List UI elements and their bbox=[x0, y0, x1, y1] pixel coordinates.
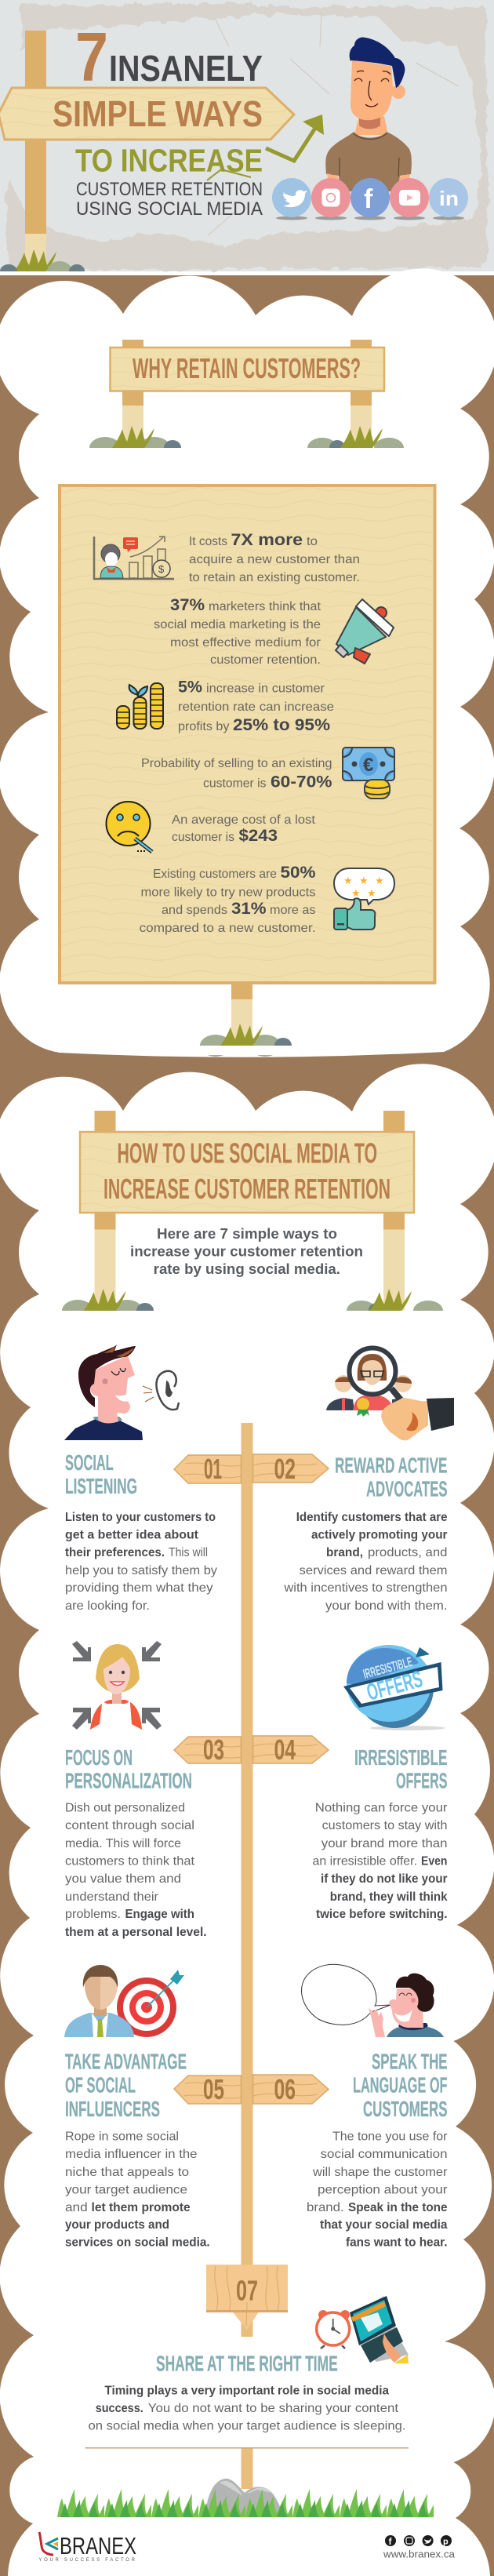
body text: Listen to your customers to bbox=[65, 1511, 216, 1524]
body text: with incentives to strengthen bbox=[283, 1581, 447, 1595]
arrow sign 05 bbox=[174, 2073, 242, 2105]
stat 1 text: acquire a new customer than bbox=[189, 553, 360, 566]
body text: services and reward them bbox=[300, 1564, 447, 1577]
item 07 sign bbox=[206, 2265, 288, 2330]
stat 1 text: 7X more bbox=[231, 531, 303, 549]
heading: PERSONALIZATION bbox=[65, 1768, 192, 1792]
item 07 body: success. bbox=[96, 2402, 143, 2415]
body text: customers to think that bbox=[65, 1854, 195, 1868]
stat 5 text: $243 bbox=[238, 827, 278, 845]
header sign post bbox=[0, 31, 94, 282]
body text bbox=[65, 2130, 210, 2250]
heading bbox=[65, 2049, 187, 2121]
title: 7 bbox=[75, 18, 108, 96]
icon: thumbs up rating bbox=[334, 868, 394, 930]
icon: speech bubble person bbox=[302, 1964, 444, 2037]
body text: This will bbox=[169, 1546, 208, 1559]
stat 4 text: 60-70% bbox=[271, 773, 332, 791]
stat 6 text bbox=[140, 864, 316, 935]
social media balls bbox=[272, 178, 468, 220]
board post bbox=[188, 984, 306, 1057]
icon: thumbs up rating: ★ bbox=[359, 875, 369, 886]
stat 2 text: most effective medium for bbox=[170, 636, 321, 649]
icon: twitter bbox=[283, 190, 307, 207]
body text: customers to stay with bbox=[322, 1819, 447, 1832]
stat 5 text bbox=[172, 813, 316, 845]
icon: support chart bbox=[94, 537, 174, 579]
icon: thumbs up rating: ★ bbox=[375, 875, 384, 886]
heading bbox=[65, 1745, 192, 1792]
divider line bbox=[85, 2447, 409, 2449]
intro text bbox=[130, 1226, 363, 1277]
body text: content through social bbox=[65, 1819, 194, 1832]
body text: Engage with bbox=[125, 1908, 194, 1921]
icon: megaphone bbox=[336, 599, 394, 664]
arrow sign 06: 06 bbox=[274, 2073, 296, 2105]
stat 4 text bbox=[141, 757, 332, 791]
body text: twice before switching. bbox=[316, 1908, 447, 1921]
item 02 bbox=[252, 1453, 448, 1613]
body text: problems. bbox=[65, 1908, 121, 1921]
character illustration bbox=[325, 37, 412, 191]
body text bbox=[65, 1511, 217, 1613]
intro text: rate by using social media. bbox=[154, 1261, 340, 1277]
item 07 body: Timing plays a very important role in social media bbox=[104, 2385, 389, 2398]
body text: their preferences. bbox=[65, 1546, 165, 1559]
arrow sign 01 bbox=[174, 1453, 242, 1485]
stat 6 text: 31% bbox=[231, 900, 267, 918]
item 01 bbox=[65, 1450, 242, 1613]
arrow sign 02: 02 bbox=[274, 1453, 296, 1485]
icon: irresistible offers badge: OFFERS bbox=[364, 1666, 425, 1706]
body text: them at a personal level. bbox=[65, 1926, 207, 1939]
item 05 bbox=[65, 2049, 242, 2250]
stat 1 text bbox=[189, 531, 360, 584]
arrow sign 03: 03 bbox=[203, 1734, 224, 1766]
body text: Speak in the tone bbox=[348, 2201, 448, 2214]
icon: listening man bbox=[64, 1344, 179, 1440]
body text: brand. bbox=[307, 2201, 344, 2214]
growth arrow bbox=[207, 115, 324, 180]
arrow sign 02 bbox=[252, 1453, 329, 1485]
body text bbox=[283, 1511, 448, 1613]
stat 5 text: An average cost of a lost bbox=[172, 813, 316, 827]
body text: brand, bbox=[326, 1546, 363, 1559]
icon: sad face bbox=[107, 802, 152, 852]
icon: linkedin: in bbox=[439, 187, 459, 210]
heading bbox=[65, 1450, 137, 1498]
item 06 bbox=[252, 2049, 448, 2250]
stat 2 text: customer retention. bbox=[210, 653, 321, 667]
body text: an irresistible offer. bbox=[312, 1854, 417, 1868]
body text: get a better idea about bbox=[65, 1528, 198, 1541]
item 07 body: on social media when your target audience is sleeping. bbox=[88, 2420, 406, 2433]
icon: facebook: f bbox=[364, 184, 373, 214]
arrow sign 04: 04 bbox=[274, 1734, 296, 1766]
body text: your brand more than bbox=[321, 1837, 447, 1850]
body text bbox=[65, 1802, 207, 1939]
panel: cloud 2 bbox=[0, 1064, 494, 2576]
body text: are looking for. bbox=[65, 1599, 150, 1613]
heading: OF SOCIAL bbox=[65, 2072, 136, 2098]
body text: media influencer in the bbox=[65, 2148, 197, 2161]
title: SIMPLE WAYS bbox=[53, 93, 263, 134]
icon: irresistible offers badge: IRRESISTIBLE bbox=[361, 1654, 414, 1682]
stat 3 text: increase in customer bbox=[206, 682, 325, 695]
stat 6 text: 50% bbox=[281, 864, 316, 882]
icon: youtube bbox=[399, 190, 420, 206]
body text: if they do not like your bbox=[321, 1872, 447, 1886]
heading bbox=[354, 1745, 447, 1792]
header arrow sign bbox=[0, 88, 294, 140]
body text: actively promoting your bbox=[311, 1528, 447, 1541]
panel: statistics board bbox=[60, 486, 434, 983]
body text: Even bbox=[421, 1854, 447, 1868]
rocks bbox=[205, 2479, 282, 2517]
intro text: increase your customer retention bbox=[130, 1244, 363, 1260]
stat 6 text: more likely to try new products bbox=[141, 886, 316, 899]
heading: SPEAK THE bbox=[372, 2049, 447, 2074]
heading: SOCIAL bbox=[65, 1450, 114, 1475]
body text: Nothing can force your bbox=[315, 1802, 447, 1815]
icon: instagram bbox=[322, 189, 340, 206]
item 07 body bbox=[88, 2385, 406, 2433]
sign: why retain customers bbox=[78, 340, 416, 459]
sign: how to use social media bbox=[47, 1111, 447, 1322]
item 07 heading: SHARE AT THE RIGHT TIME bbox=[156, 2351, 338, 2375]
body text: The tone you use for bbox=[332, 2130, 447, 2144]
heading: OFFERS bbox=[396, 1768, 447, 1792]
icon: clock and laptop bbox=[317, 2296, 409, 2363]
body text: services on social media. bbox=[65, 2236, 210, 2250]
footer social icons bbox=[385, 2535, 452, 2547]
item 07 sign: 07 bbox=[236, 2275, 258, 2307]
body text: you value them and bbox=[65, 1872, 181, 1886]
arrow sign 06 bbox=[252, 2073, 329, 2105]
icon: support chart: $ bbox=[158, 563, 165, 575]
logo: branex: BRANEX bbox=[60, 2532, 136, 2560]
item 07 body: You do not want to be sharing your content bbox=[148, 2402, 399, 2415]
arrow sign 03 bbox=[174, 1734, 242, 1766]
icon: banknote and coins bbox=[343, 748, 394, 799]
icon: irresistible offers badge bbox=[343, 1643, 445, 1730]
body text: Dish out personalized bbox=[65, 1802, 185, 1815]
stat 6 text: more as bbox=[270, 904, 316, 917]
title: TO INCREASE bbox=[75, 143, 263, 179]
title: INSANELY bbox=[109, 48, 263, 89]
body text: Rope in some social bbox=[65, 2130, 179, 2144]
body text: Identify customers that are bbox=[296, 1511, 448, 1524]
header background bbox=[0, 0, 494, 271]
icon: banknote and coins: € bbox=[363, 755, 373, 776]
body text: providing them what they bbox=[65, 1581, 213, 1595]
arrow sign 01: 01 bbox=[204, 1453, 222, 1485]
heading bbox=[335, 1453, 447, 1501]
body text bbox=[312, 1802, 448, 1921]
body text: that your social media bbox=[320, 2218, 448, 2232]
icon: thumbs up rating: ★ bbox=[351, 887, 361, 899]
body text: your bond with them. bbox=[325, 1599, 447, 1613]
stat 6 text: Existing customers are bbox=[153, 868, 277, 881]
stat 3 text: 25% to 95% bbox=[233, 716, 330, 734]
arrow sign 04 bbox=[252, 1734, 329, 1766]
body text bbox=[307, 2130, 448, 2250]
body text: brand, they will think bbox=[330, 1890, 448, 1904]
body text: your products and bbox=[65, 2218, 169, 2232]
stat 2 text: social media marketing is the bbox=[154, 618, 321, 631]
body text: media. This will force bbox=[65, 1837, 181, 1850]
footer social icons: f bbox=[389, 2536, 392, 2547]
body text: perception about your bbox=[318, 2183, 447, 2196]
stat 3 text: retention rate can increase bbox=[178, 700, 334, 714]
title: CUSTOMER RETENTION bbox=[76, 179, 263, 200]
stat 2 text: 37% bbox=[170, 596, 205, 614]
central signpost bbox=[242, 1423, 252, 2489]
heading: FOCUS ON bbox=[65, 1745, 133, 1770]
body text: products, and bbox=[368, 1546, 447, 1559]
title: USING SOCIAL MEDIA bbox=[76, 198, 263, 220]
body text: and bbox=[65, 2201, 88, 2214]
body text: social communication bbox=[321, 2148, 447, 2161]
stat 6 text: compared to a new customer. bbox=[140, 922, 316, 935]
stat 3 text: profits by bbox=[178, 720, 230, 733]
stat 4 text: customer is bbox=[203, 777, 267, 791]
heading: LISTENING bbox=[65, 1474, 137, 1498]
icon: magnifier on advocates bbox=[326, 1348, 454, 1440]
grass bbox=[57, 2489, 434, 2517]
stat 1 text: to retain an existing customer. bbox=[189, 571, 360, 584]
logo: branex bbox=[38, 2532, 136, 2563]
body text: your target audience bbox=[65, 2183, 187, 2196]
stat 3 text bbox=[178, 678, 334, 734]
stat 4 text: Probability of selling to an existing bbox=[141, 757, 332, 770]
stat 5 text: customer is bbox=[172, 831, 234, 844]
stat 2 text bbox=[154, 596, 321, 667]
logo: branex: YOUR SUCCESS FACTOR bbox=[38, 2558, 136, 2563]
panel: cloud 1 bbox=[0, 268, 494, 1057]
arrow sign 05: 05 bbox=[203, 2073, 224, 2105]
icon: coin stacks bbox=[117, 683, 163, 729]
item 04 bbox=[252, 1734, 448, 1921]
heading bbox=[353, 2049, 447, 2121]
heading: INFLUENCERS bbox=[65, 2097, 160, 2121]
body text: will shape the customer bbox=[312, 2166, 447, 2179]
icon: thumbs up rating: ★ bbox=[367, 887, 376, 899]
footer social icons: p bbox=[443, 2537, 449, 2546]
stat 1 text: It costs bbox=[189, 535, 227, 548]
title bbox=[53, 18, 263, 220]
body text: let them promote bbox=[91, 2201, 191, 2214]
icon: thumbs up rating: ★ bbox=[343, 875, 353, 886]
body text: fans want to hear. bbox=[346, 2236, 447, 2250]
stat 6 text: and spends bbox=[162, 904, 227, 917]
intro text: Here are 7 simple ways to bbox=[157, 1226, 337, 1242]
body text: understand their bbox=[65, 1890, 158, 1904]
body text: niche that appeals to bbox=[65, 2166, 189, 2179]
heading: TAKE ADVANTAGE bbox=[65, 2049, 187, 2074]
stat 1 text: to bbox=[307, 535, 318, 548]
stat 3 text: 5% bbox=[178, 678, 202, 697]
icon: personalization woman bbox=[72, 1641, 162, 1730]
body text: help you to satisfy them by bbox=[65, 1564, 217, 1577]
icon: influencer and target bbox=[64, 1965, 184, 2037]
item 03 bbox=[65, 1734, 242, 1939]
website url: www.branex.ca bbox=[383, 2549, 455, 2560]
stat 2 text: marketers think that bbox=[209, 600, 321, 613]
